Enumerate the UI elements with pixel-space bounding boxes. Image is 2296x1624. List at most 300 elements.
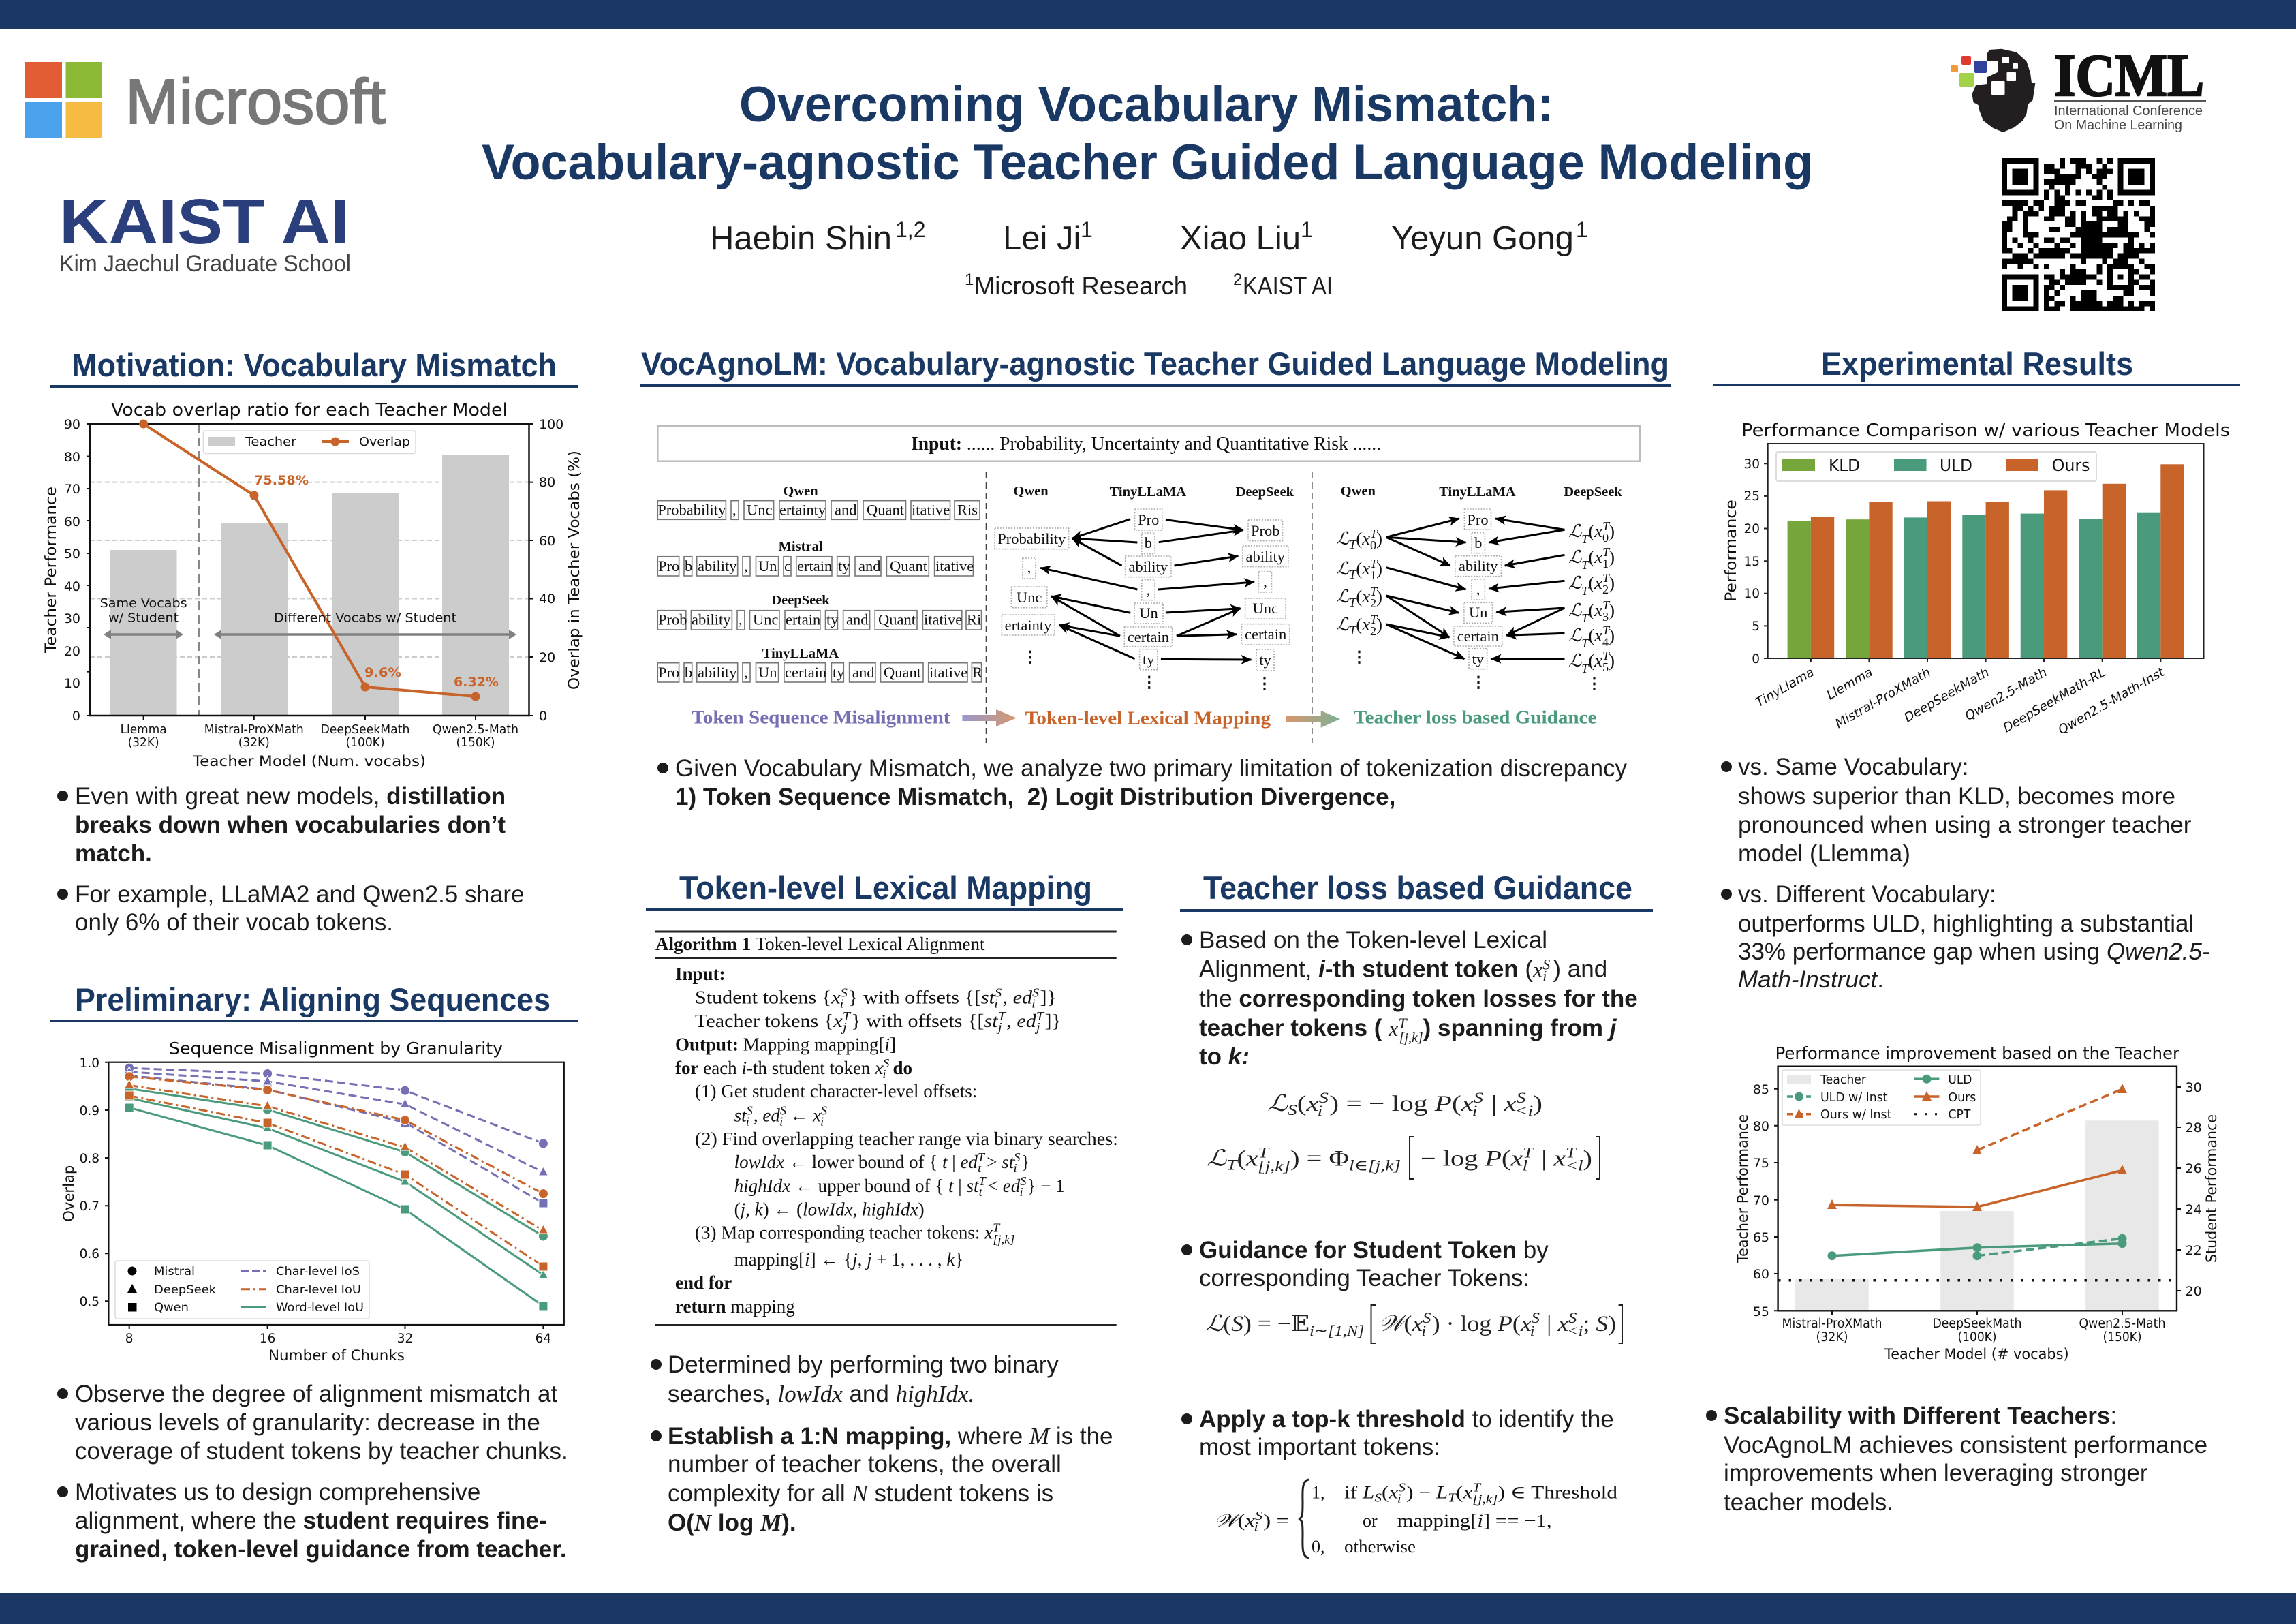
chart: performance improvement: Student Performance	[2203, 1114, 2220, 1263]
algorithm box: Student tokens { x	[695, 987, 839, 1007]
equation: student objective: S	[1568, 1309, 1577, 1326]
logo: Microsoft	[25, 62, 386, 138]
affiliations: 1	[965, 271, 974, 289]
chart: performance improvement: Mistral-ProXMath	[1782, 1317, 1882, 1331]
chart: sequence misalignment: Overlap	[61, 1165, 77, 1222]
chart: performance comparison: 0	[1752, 652, 1760, 667]
chart: sequence misalignment: Char-level IoU	[276, 1283, 361, 1297]
algorithm box: (j, k) ← (lowIdx, highIdx)	[734, 1199, 925, 1220]
equation: weight function: (	[1456, 1483, 1463, 1502]
chart: vocab overlap ratio: 50	[64, 547, 80, 562]
teacher loss guidance graph	[1336, 484, 1622, 692]
token sequences per model: Quant	[867, 502, 905, 519]
equation: weight function: L	[1436, 1483, 1448, 1502]
bullet: token losses with equations: j	[1607, 1015, 1617, 1041]
teacher loss guidance graph: ℒ	[1336, 615, 1350, 634]
heading: Experimental Results	[1713, 346, 2240, 386]
teacher loss guidance graph: Un	[1469, 604, 1487, 621]
equation: student loss: i	[1472, 1102, 1478, 1119]
chart: performance improvement: Qwen2.5-Math	[2079, 1317, 2165, 1331]
equation: weight function: ) ∈ Threshold	[1498, 1483, 1617, 1502]
teacher loss guidance graph: )	[1609, 521, 1615, 541]
teacher loss guidance graph: 0	[1370, 538, 1376, 552]
teacher loss guidance graph: T	[1349, 624, 1357, 637]
equation: teacher loss: ℒ	[1207, 1147, 1228, 1171]
teacher loss guidance graph: 2	[1370, 596, 1376, 610]
bullets: experimental results: outperforms ULD, highlighting a substantial	[1738, 910, 2194, 937]
authors: Yeyun Gong	[1391, 220, 1574, 257]
equation: weight function: i	[1254, 1520, 1258, 1533]
chart: performance improvement: 28	[2186, 1120, 2202, 1135]
logo: Microsoft: Microsoft	[125, 66, 386, 137]
teacher loss guidance graph: ℒ	[1568, 626, 1583, 645]
algorithm box: return mapping	[675, 1296, 795, 1317]
algorithm box: } − 1	[1027, 1176, 1065, 1196]
equation: weight function: S	[1255, 1509, 1262, 1522]
teacher loss guidance graph: ℒ	[1336, 559, 1350, 579]
chart: performance improvement: (150K)	[2103, 1330, 2142, 1345]
teacher loss guidance graph: certain	[1457, 628, 1499, 645]
chart: vocab overlap ratio: Vocab overlap ratio for each Teacher Model	[111, 400, 508, 420]
input sentence box: Input: ...... Probability, Uncertainty and Quantitative Risk ......	[911, 433, 1381, 455]
algorithm box: Output: Mapping mapping[i]	[675, 1034, 896, 1054]
bullet: scalability: teacher models.	[1724, 1489, 1893, 1516]
token sequences per model: TinyLLaMA	[762, 646, 839, 661]
chart: vocab overlap ratio: (32K)	[128, 736, 159, 750]
bullets: mapping notes: Determined by performing two binary	[668, 1351, 1059, 1378]
teacher loss guidance graph: T	[1370, 557, 1378, 570]
equation: teacher loss: |	[1534, 1147, 1553, 1171]
lexical mapping graph: ,	[1263, 573, 1267, 590]
teacher loss guidance graph: ⋮	[1471, 673, 1486, 690]
token sequences per model: and	[835, 502, 857, 519]
teacher loss guidance graph: ℒ	[1336, 587, 1350, 607]
title	[482, 77, 1813, 190]
teacher loss guidance graph: x	[1594, 521, 1603, 541]
equation: weight function: mapping[ i] == −1,	[1397, 1511, 1552, 1531]
teacher loss guidance graph: Qwen	[1341, 484, 1376, 499]
bullet: tokenization discrepancy: Given Vocabulary Mismatch, we analyze two primary limitation of tokenization discrepancy	[675, 755, 1627, 782]
equation: student objective: S	[1423, 1309, 1431, 1326]
chart: sequence misalignment: 16	[260, 1332, 275, 1346]
token sequences per model: ty	[826, 611, 839, 628]
token sequences per model: certain	[785, 664, 826, 681]
chart: performance comparison: KLD	[1829, 456, 1860, 475]
equation: student loss: ) = − log	[1329, 1092, 1435, 1116]
chart: vocab overlap ratio: 10	[64, 676, 80, 691]
algorithm box: j	[997, 1020, 1002, 1034]
heading: VocAgnoLM: VocAgnoLM: Vocabulary-agnostic Teacher Guided Language Modeling	[641, 346, 1669, 382]
chart: performance improvement: ULD	[1948, 1073, 1972, 1087]
algorithm box: S	[883, 1056, 889, 1070]
equation: weight function	[1214, 1480, 1617, 1558]
algorithm box: T	[993, 1221, 1001, 1235]
teacher loss guidance graph: )	[1609, 573, 1615, 593]
chart: vocab overlap ratio: 90	[64, 417, 80, 432]
bullet: token losses with equations: most important tokens:	[1199, 1434, 1440, 1460]
teacher loss guidance graph: ℒ	[1568, 573, 1583, 593]
lexical mapping graph: Un	[1139, 604, 1158, 622]
token sequences per model: Un	[758, 557, 777, 574]
bullets: experimental results: model (Llemma)	[1738, 840, 1910, 867]
chart: sequence misalignment	[61, 1039, 564, 1364]
chart: performance comparison: 30	[1743, 457, 1760, 472]
bullets: experimental results	[1721, 754, 2210, 993]
chart: vocab overlap ratio: DeepSeekMath	[320, 723, 410, 737]
chart: performance comparison: DeepSeekMath-RL	[2001, 665, 2108, 735]
teacher loss guidance graph: 0	[1602, 531, 1609, 545]
equation: weight function: (	[1382, 1483, 1389, 1502]
equation: student loss: S	[1288, 1101, 1297, 1118]
equation: teacher loss: )	[1583, 1147, 1592, 1171]
token sequences per model: ,	[744, 664, 748, 681]
heading: Motivation: Motivation: Vocabulary Mismatch	[72, 347, 557, 383]
bullets: preliminary: Motivates us to design comprehensive	[75, 1479, 480, 1505]
equation: weight function: otherwise	[1344, 1537, 1416, 1557]
teacher loss guidance graph: )	[1376, 587, 1382, 607]
algorithm box: i	[746, 1114, 749, 1128]
stage labels and arrows: Token Sequence Misalignment	[692, 707, 950, 728]
equation: teacher loss: x	[1245, 1147, 1258, 1171]
teacher loss guidance graph: (	[1588, 651, 1594, 671]
chart: vocab overlap ratio: 60	[64, 515, 80, 530]
bullets: preliminary: Observe the degree of alignment mismatch at	[75, 1381, 557, 1407]
authors: Haebin Shin	[710, 220, 892, 257]
chart: vocab overlap ratio: 0	[539, 709, 547, 724]
teacher loss guidance graph: ℒ	[1568, 600, 1583, 620]
token sequences per model: Pro	[658, 664, 679, 681]
token sequences per model: Qwen	[783, 484, 818, 499]
token sequences per model: ability	[698, 664, 737, 681]
algorithm box: Teacher tokens { x	[695, 1011, 841, 1031]
bullets: motivation: breaks down when vocabularies don’t	[75, 812, 506, 838]
algorithm box: ed	[1013, 987, 1033, 1007]
diagram: token pipeline	[657, 426, 1640, 743]
affiliations: Microsoft Research	[974, 272, 1188, 300]
equation: student loss: i	[1318, 1102, 1322, 1119]
bullet: token losses with equations: ) and	[1553, 956, 1607, 983]
chart: performance comparison: 5	[1752, 619, 1760, 634]
chart: sequence misalignment: Mistral	[154, 1265, 195, 1278]
teacher loss guidance graph: T	[1370, 585, 1378, 598]
token sequences per model: ability	[698, 557, 737, 574]
chart: vocab overlap ratio: Mistral-ProXMath	[204, 723, 304, 737]
lexical mapping graph: Qwen	[1013, 484, 1049, 499]
bullets: preliminary: grained, token-level guidance from teacher.	[75, 1536, 567, 1563]
algorithm box: ]}	[1040, 987, 1057, 1007]
authors: 1	[1301, 217, 1313, 242]
chart: performance improvement: DeepSeekMath	[1932, 1317, 2022, 1331]
chart: sequence misalignment: 0.9	[80, 1104, 99, 1118]
algorithm box: do	[893, 1058, 912, 1078]
bullet: token losses with equations: to k:	[1199, 1043, 1250, 1070]
equation: student objective: ;	[1583, 1312, 1596, 1336]
teacher loss guidance graph: x	[1594, 626, 1603, 645]
equation: weight function: x	[1462, 1483, 1473, 1502]
teacher loss guidance graph: T	[1602, 545, 1610, 559]
bullets: preliminary: various levels of granularity: decrease in the	[75, 1409, 540, 1436]
bullets: experimental results: shows superior than KLD, becomes more	[1738, 783, 2175, 810]
equation: weight function: 1,	[1312, 1483, 1324, 1502]
teacher loss guidance graph: T	[1370, 527, 1378, 540]
equation: student loss: ℒ	[1267, 1092, 1288, 1116]
chart: vocab overlap ratio: Teacher	[245, 435, 297, 449]
equation: teacher loss: <l	[1565, 1157, 1583, 1174]
teacher loss guidance graph: (	[1588, 521, 1594, 541]
heading: Preliminary: Preliminary: Aligning Sequences	[75, 981, 550, 1017]
equation: weight function: or	[1363, 1511, 1378, 1531]
algorithm box: ←	[790, 1105, 813, 1125]
chart: performance improvement	[1735, 1043, 2220, 1362]
equation: weight function: if L	[1344, 1483, 1372, 1502]
bullets: preliminary: coverage of student tokens by teacher chunks.	[75, 1438, 568, 1465]
authors: 1	[1576, 217, 1588, 242]
token sequences per model: b	[685, 557, 692, 574]
teacher loss guidance graph: T	[1581, 584, 1589, 598]
algorithm box: ed	[1017, 1011, 1036, 1031]
equation: student loss: S	[1474, 1089, 1483, 1106]
teacher loss guidance graph: x	[1594, 600, 1603, 620]
lexical mapping graph: ⋮	[1257, 675, 1272, 692]
equation: teacher loss: T	[1226, 1156, 1238, 1174]
lexical mapping graph	[995, 484, 1294, 692]
chart: vocab overlap ratio: Different Vocabs w/ Student	[274, 611, 456, 626]
chart: performance comparison	[1723, 420, 2230, 737]
title: Vocabulary-agnostic Teacher Guided Language Modeling	[482, 135, 1813, 190]
bullets: mapping notes: complexity for all N student tokens is	[668, 1480, 1053, 1507]
lexical mapping graph: ability	[1129, 558, 1168, 575]
algorithm box: S	[747, 1103, 753, 1117]
heading: Token-level Lexical Mapping: Token-level Lexical Mapping	[679, 870, 1092, 906]
token sequences per model: b	[685, 664, 692, 681]
teacher loss guidance graph: T	[1581, 637, 1589, 650]
chart: performance comparison: 10	[1743, 587, 1760, 601]
teacher loss guidance graph: T	[1581, 532, 1589, 546]
bullets: motivation: only 6% of their vocab tokens.	[75, 909, 393, 936]
algorithm box: } with offsets {[	[851, 1011, 984, 1031]
token sequences per model: and	[846, 611, 868, 628]
algorithm box: i	[1019, 1185, 1023, 1199]
algorithm box: S	[780, 1103, 786, 1117]
equation: student objective: S)	[1596, 1312, 1615, 1336]
teacher loss guidance graph: T	[1602, 571, 1610, 585]
teacher loss guidance graph: x	[1361, 559, 1371, 579]
teacher loss guidance graph: T	[1602, 624, 1610, 637]
equation: weight function: ) −	[1406, 1483, 1436, 1502]
chart: vocab overlap ratio: (32K)	[238, 736, 270, 750]
chart: performance comparison: 15	[1743, 555, 1760, 569]
heading: Teacher loss based Guidance: Teacher loss based Guidance	[1203, 870, 1632, 906]
bullet: scalability: improvements when leveraging stronger	[1724, 1460, 2148, 1486]
lexical mapping graph: ty	[1259, 652, 1271, 669]
algorithm box: [j,k]	[993, 1233, 1014, 1246]
algorithm box: j	[841, 1020, 847, 1034]
authors: Xiao Liu	[1180, 220, 1301, 257]
bullets: motivation: match.	[75, 840, 152, 867]
chart: vocab overlap ratio: 9.6%	[364, 665, 401, 680]
chart: vocab overlap ratio: 70	[64, 482, 80, 497]
algorithm box: st	[734, 1105, 747, 1125]
teacher loss guidance graph: 2	[1602, 583, 1609, 596]
teacher loss guidance graph: x	[1361, 587, 1371, 607]
chart: performance improvement: 80	[1753, 1119, 1769, 1134]
teacher loss guidance graph: TinyLLaMA	[1439, 485, 1516, 500]
equation: weight function: 𝒲 (x	[1214, 1511, 1253, 1531]
algorithm box: ,	[754, 1105, 762, 1125]
lexical mapping graph: b	[1145, 534, 1152, 551]
lexical mapping graph: ty	[1143, 651, 1155, 668]
teacher loss guidance graph: (	[1588, 600, 1594, 620]
equation: student objective: i	[1421, 1322, 1426, 1339]
lexical mapping graph: Unc	[1253, 600, 1278, 617]
teacher loss guidance graph: (	[1356, 529, 1362, 549]
teacher loss guidance graph: )	[1376, 559, 1382, 579]
teacher loss guidance graph: ℒ	[1568, 547, 1583, 567]
token sequences per model: ertain	[786, 611, 820, 628]
teacher loss guidance graph: 1	[1602, 557, 1609, 570]
chart: vocab overlap ratio: 20	[539, 650, 555, 665]
bullets: experimental results: pronounced when using a stronger teacher	[1738, 812, 2192, 838]
algorithm box: end for	[675, 1272, 732, 1293]
chart: performance comparison: 20	[1743, 522, 1760, 536]
lexical mapping graph: ,	[1027, 559, 1031, 576]
teacher loss guidance graph: (	[1356, 615, 1362, 634]
token sequences per model: ,	[732, 502, 736, 519]
teacher loss guidance graph: T	[1581, 662, 1589, 675]
bullet: token losses with equations: Alignment, i-th student token (x	[1199, 956, 1542, 983]
stage labels and arrows: Token-level Lexical Mapping	[1025, 708, 1271, 729]
algorithm box: mapping[i] ← {j, j + 1, . . . , k}	[734, 1249, 963, 1270]
logo: ICML: On Machine Learning	[2054, 118, 2182, 133]
teacher loss guidance graph: (	[1356, 559, 1362, 579]
chart: vocab overlap ratio: w/ Student	[108, 611, 179, 626]
lexical mapping graph: ,	[1147, 581, 1150, 598]
chart: performance comparison: TinyLlama	[1753, 665, 1816, 710]
equation: teacher loss: [j,k]	[1258, 1158, 1290, 1175]
bullet: token losses with equations: the corresponding token losses for the	[1199, 985, 1638, 1012]
chart: vocab overlap ratio: Teacher Performance	[43, 487, 60, 654]
chart: vocab overlap ratio: 40	[539, 592, 555, 607]
chart: sequence misalignment: 32	[397, 1332, 413, 1346]
chart: vocab overlap ratio: Teacher Model (Num. vocabs)	[192, 753, 426, 770]
algorithm box: i	[994, 996, 998, 1010]
chart: sequence misalignment: 64	[536, 1332, 551, 1346]
chart: sequence misalignment: 1.0	[80, 1056, 99, 1071]
chart: performance improvement: 75	[1753, 1156, 1769, 1171]
algorithm box: i	[820, 1114, 824, 1128]
equation: weight function: 0,	[1312, 1537, 1324, 1557]
chart: performance comparison: Llemma	[1825, 665, 1875, 703]
chart: sequence misalignment: DeepSeek	[154, 1283, 216, 1297]
equation: weight function: x	[1388, 1483, 1399, 1502]
chart: performance comparison: Performance	[1723, 500, 1740, 602]
token sequences per model: and	[852, 664, 875, 681]
lexical mapping graph: ⋮	[1023, 648, 1038, 665]
chart: performance comparison: DeepSeekMath	[1902, 665, 1992, 725]
teacher loss guidance graph: 1	[1370, 568, 1376, 582]
lexical mapping graph: certain	[1245, 626, 1286, 643]
bullet: token losses with equations: i	[1542, 968, 1547, 985]
lexical mapping graph: Probability	[997, 530, 1066, 547]
chart: performance improvement: 70	[1753, 1193, 1769, 1208]
lexical mapping graph: ertainty	[1005, 617, 1052, 634]
logo: KAIST AI: Kim Jaechul Graduate School	[59, 251, 351, 277]
chart: performance improvement: 65	[1753, 1230, 1769, 1245]
equation: teacher loss: l∈[j,k]	[1349, 1157, 1401, 1174]
lexical mapping graph: DeepSeek	[1236, 485, 1294, 500]
chart: performance comparison: Mistral-ProXMath	[1833, 665, 1934, 731]
bullet: tokenization discrepancy: 1) Token Sequence Mismatch, 2) Logit Distribution Divergence,	[675, 784, 1395, 810]
chart: vocab overlap ratio	[43, 400, 583, 770]
lexical mapping graph: ability	[1246, 548, 1286, 565]
logo: KAIST AI: KAIST AI	[59, 186, 350, 257]
teacher loss guidance graph: (	[1588, 573, 1594, 593]
chart: performance comparison: Qwen2.5-Math	[1963, 665, 2049, 724]
equation: student objective: i∼[1,N]	[1309, 1322, 1364, 1339]
equation: student objective: i	[1530, 1322, 1535, 1339]
token sequences per model: itative	[929, 664, 967, 681]
token sequences per model: Probability	[657, 502, 726, 519]
teacher loss guidance graph: )	[1609, 600, 1615, 620]
chart: sequence misalignment: Char-level IoS	[276, 1265, 360, 1278]
equation: student loss: S	[1517, 1089, 1526, 1106]
teacher loss guidance graph: 4	[1602, 635, 1609, 649]
algorithm box: ed	[1003, 1176, 1021, 1196]
bullet: token losses with equations: ) spanning from	[1423, 1015, 1610, 1041]
QR code	[2002, 158, 2155, 311]
bullets: mapping notes	[651, 1351, 1113, 1536]
chart: vocab overlap ratio: (150K)	[456, 736, 495, 750]
equation: student loss: (	[1297, 1092, 1307, 1116]
authors	[710, 217, 1588, 257]
chart: sequence misalignment: Qwen	[154, 1301, 189, 1315]
equation: weight function: T	[1472, 1480, 1482, 1494]
algorithm box: j	[1035, 1020, 1040, 1034]
algorithm box: S	[1020, 1174, 1026, 1188]
teacher loss guidance graph: 5	[1602, 660, 1609, 674]
equation: student loss: x	[1503, 1092, 1517, 1116]
input sentence box	[657, 426, 1640, 461]
chart: performance comparison: 25	[1743, 489, 1760, 504]
teacher loss guidance graph: (	[1588, 547, 1594, 567]
teacher loss guidance graph: (	[1356, 587, 1362, 607]
algorithm box: (3) Map corresponding teacher tokens: x	[695, 1223, 993, 1243]
chart: performance improvement: Teacher Model (# vocabs)	[1884, 1346, 2069, 1362]
chart: performance improvement: ULD w/ Inst	[1820, 1091, 1888, 1105]
token sequences per model: ,	[739, 611, 743, 628]
teacher loss guidance graph: DeepSeek	[1564, 485, 1622, 500]
equation: teacher loss: ) = Φ	[1290, 1147, 1349, 1171]
chart: vocab overlap ratio: Overlap in Teacher Vocabs (%)	[566, 450, 583, 690]
bullet: token losses with equations: teacher tokens ( x	[1199, 1015, 1398, 1041]
chart: vocab overlap ratio: 100	[539, 417, 563, 432]
teacher loss guidance graph: T	[1602, 519, 1610, 533]
equation: student objective: 𝒲(x	[1378, 1312, 1422, 1336]
bullet: scalability	[1706, 1403, 2207, 1516]
teacher loss guidance graph: b	[1474, 534, 1482, 551]
bullets: experimental results: 33% performance gap when using Qwen2.5-	[1738, 938, 2210, 965]
algorithm box: (1) Get student character-level offsets:	[695, 1081, 977, 1101]
teacher loss guidance graph: ,	[1476, 581, 1480, 598]
chart: performance improvement: 20	[2186, 1284, 2202, 1299]
algorithm box: i	[882, 1067, 886, 1081]
chart: vocab overlap ratio: 60	[539, 534, 555, 549]
bullets: mapping notes: number of teacher tokens, the overall	[668, 1451, 1061, 1477]
token sequences per model: Un	[758, 664, 777, 681]
lexical mapping graph: certain	[1128, 628, 1169, 645]
token sequences per model: Quant	[878, 611, 916, 628]
equation: weight function: S	[1374, 1491, 1382, 1505]
